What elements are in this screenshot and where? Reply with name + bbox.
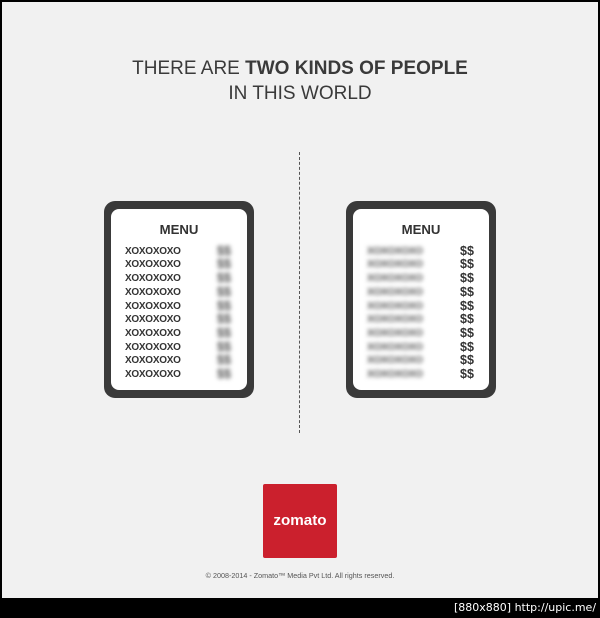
panel: left menu with clear items and blurred prices: $$ xyxy=(217,299,231,313)
title: IN THIS WORLD xyxy=(228,83,372,104)
panel: right menu with blurred items and clear prices: XOXOXOXO xyxy=(367,342,423,353)
panel: right menu with blurred items and clear prices: XOXOXOXO xyxy=(367,369,423,380)
watermark: [880x880] http://upic.me/ xyxy=(454,601,596,614)
panel: left menu with clear items and blurred prices: XOXOXOXO xyxy=(125,369,181,380)
panel: right menu with blurred items and clear prices: $$ xyxy=(460,299,474,313)
panel: left menu with clear items and blurred prices: XOXOXOXO xyxy=(125,314,181,325)
panel: left menu with clear items and blurred prices: $$ xyxy=(217,353,231,367)
panel: right menu with blurred items and clear prices: XOXOXOXO xyxy=(367,273,423,284)
panel: left menu with clear items and blurred prices: $$ xyxy=(217,340,231,354)
panel: left menu with clear items and blurred prices: $$ xyxy=(217,326,231,340)
divider: dashed vertical line xyxy=(299,152,300,433)
panel: right menu with blurred items and clear prices: $$ xyxy=(460,326,474,340)
panel: left menu with clear items and blurred prices: $$ xyxy=(217,257,231,271)
panel: left menu with clear items and blurred prices: XOXOXOXO xyxy=(125,273,181,284)
panel: right menu with blurred items and clear prices: $$ xyxy=(460,257,474,271)
panel: right menu with blurred items and clear prices: $$ xyxy=(460,367,474,381)
panel: left menu with clear items and blurred prices: XOXOXOXO xyxy=(125,328,181,339)
panel: left menu with clear items and blurred prices: MENU xyxy=(160,222,198,236)
panel: right menu with blurred items and clear prices: XOXOXOXO xyxy=(367,259,423,270)
panel: right menu with blurred items and clear prices: XOXOXOXO xyxy=(367,246,423,257)
panel: left menu with clear items and blurred prices: $$ xyxy=(217,285,231,299)
panel: left menu with clear items and blurred prices: XOXOXOXO xyxy=(125,342,181,353)
panel: left menu with clear items and blurred prices: XOXOXOXO xyxy=(125,259,181,270)
title xyxy=(132,58,468,104)
title: THERE ARE TWO KINDS OF PEOPLE xyxy=(132,58,468,79)
panel: right menu with blurred items and clear prices: $$ xyxy=(460,244,474,258)
panel: left menu with clear items and blurred prices: $$ xyxy=(217,244,231,258)
panel: right menu with blurred items and clear prices xyxy=(346,201,496,398)
panel: right menu with blurred items and clear prices: XOXOXOXO xyxy=(367,301,423,312)
panel: left menu with clear items and blurred prices: XOXOXOXO xyxy=(125,287,181,298)
logo: zomato: zomato xyxy=(273,512,327,529)
panel: right menu with blurred items and clear prices: $$ xyxy=(460,340,474,354)
logo: zomato xyxy=(263,484,337,558)
panel: right menu with blurred items and clear prices: $$ xyxy=(460,312,474,326)
panel: right menu with blurred items and clear prices: $$ xyxy=(460,271,474,285)
panel: right menu with blurred items and clear prices: XOXOXOXO xyxy=(367,328,423,339)
panel: left menu with clear items and blurred prices: $$ xyxy=(217,312,231,326)
panel: right menu with blurred items and clear prices: MENU xyxy=(402,222,440,236)
panel: right menu with blurred items and clear prices: XOXOXOXO xyxy=(367,314,423,325)
copyright text: © 2008-2014 - Zomato™ Media Pvt Ltd. All rights reserved. xyxy=(206,571,394,580)
panel: left menu with clear items and blurred prices xyxy=(104,201,254,398)
panel: left menu with clear items and blurred prices: $$ xyxy=(217,271,231,285)
panel: right menu with blurred items and clear prices: $$ xyxy=(460,353,474,367)
panel: right menu with blurred items and clear prices: XOXOXOXO xyxy=(367,355,423,366)
panel: left menu with clear items and blurred prices: XOXOXOXO xyxy=(125,301,181,312)
panel: left menu with clear items and blurred prices: XOXOXOXO xyxy=(125,246,181,257)
panel: left menu with clear items and blurred prices: XOXOXOXO xyxy=(125,355,181,366)
panel: left menu with clear items and blurred prices: $$ xyxy=(217,367,231,381)
panel: right menu with blurred items and clear prices: XOXOXOXO xyxy=(367,287,423,298)
panel: right menu with blurred items and clear prices: $$ xyxy=(460,285,474,299)
